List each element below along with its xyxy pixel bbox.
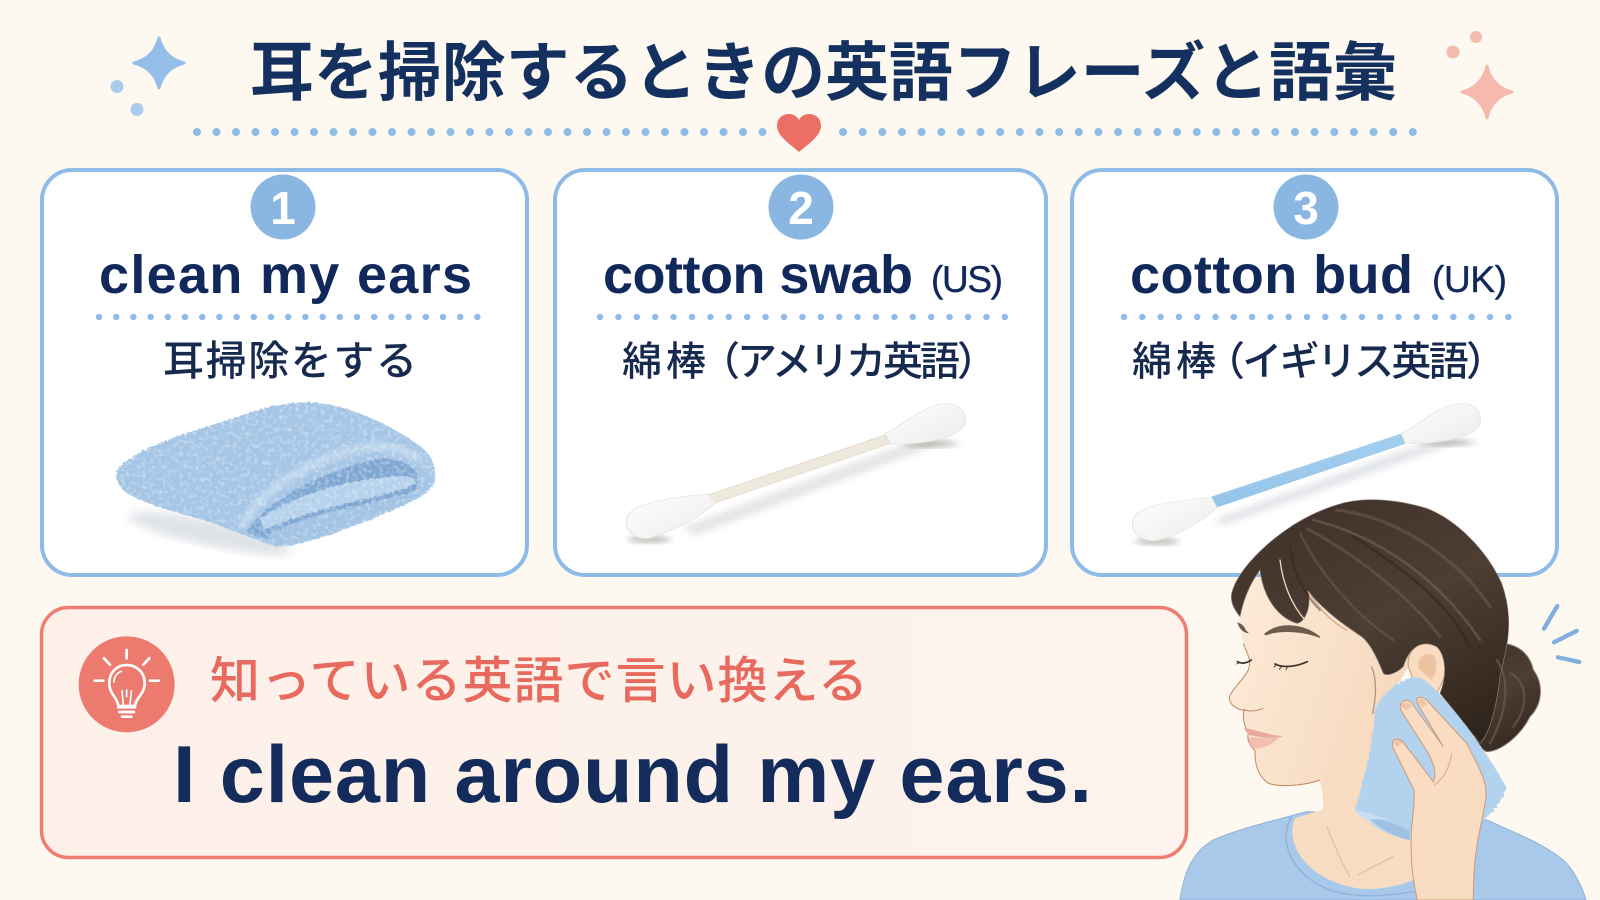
phrase: (US) — [931, 259, 1003, 300]
panel: cotton bud — [1072, 170, 1557, 575]
icon: folded blue towel — [117, 402, 435, 563]
title divider with heart — [197, 114, 1413, 152]
number badge 2 — [768, 174, 834, 240]
number badge 2: 2 — [788, 182, 814, 234]
meaning: 綿棒 — [1132, 340, 1216, 384]
eyebrow — [1238, 623, 1320, 637]
icon: blue cotton swab — [1133, 403, 1480, 545]
hair — [1231, 500, 1509, 743]
eyes — [1237, 660, 1307, 670]
motion lines — [1544, 606, 1579, 662]
number badge 3 — [1274, 174, 1338, 240]
hair strands — [1280, 510, 1524, 743]
phrase: clean my ears — [99, 245, 472, 305]
nose and lips — [1243, 708, 1283, 749]
number badge 1: 1 — [270, 182, 296, 234]
towel held to ear — [1355, 677, 1507, 841]
phrase: cotton swab — [603, 245, 913, 305]
callout sentence: I clean around my ears. — [173, 730, 1092, 820]
icon: heart — [777, 114, 821, 152]
callout heading: 知っている英語で言い換える — [210, 653, 868, 709]
phrase: (UK) — [1432, 259, 1507, 300]
meaning: （イギリス英語） — [1205, 340, 1506, 384]
shirt — [1180, 812, 1586, 900]
panel: cotton swab — [555, 170, 1046, 575]
meaning: 耳掃除をする — [163, 338, 417, 384]
illustration: woman cleaning ear with towel — [1180, 500, 1586, 900]
panel: clean my ears — [42, 170, 527, 575]
bun — [1447, 643, 1540, 752]
number badge 1 — [250, 174, 316, 240]
hand — [1392, 697, 1486, 900]
panel: callout — [42, 608, 1186, 858]
face — [1229, 567, 1413, 786]
ear — [1408, 643, 1445, 693]
icon: white cotton swab — [626, 403, 965, 543]
meaning: （アメリカ英語） — [700, 340, 997, 384]
icon: blue sparkle with dots — [110, 38, 184, 116]
phrase: cotton bud — [1130, 245, 1413, 305]
meaning: 綿棒 — [622, 340, 706, 384]
icon: light bulb — [79, 636, 175, 732]
number badge 3: 3 — [1293, 182, 1319, 234]
title: 耳を掃除するときの英語フレーズと語彙 — [250, 37, 1397, 109]
neck — [1292, 713, 1427, 889]
icon: pink sparkle with dots — [1446, 31, 1512, 118]
